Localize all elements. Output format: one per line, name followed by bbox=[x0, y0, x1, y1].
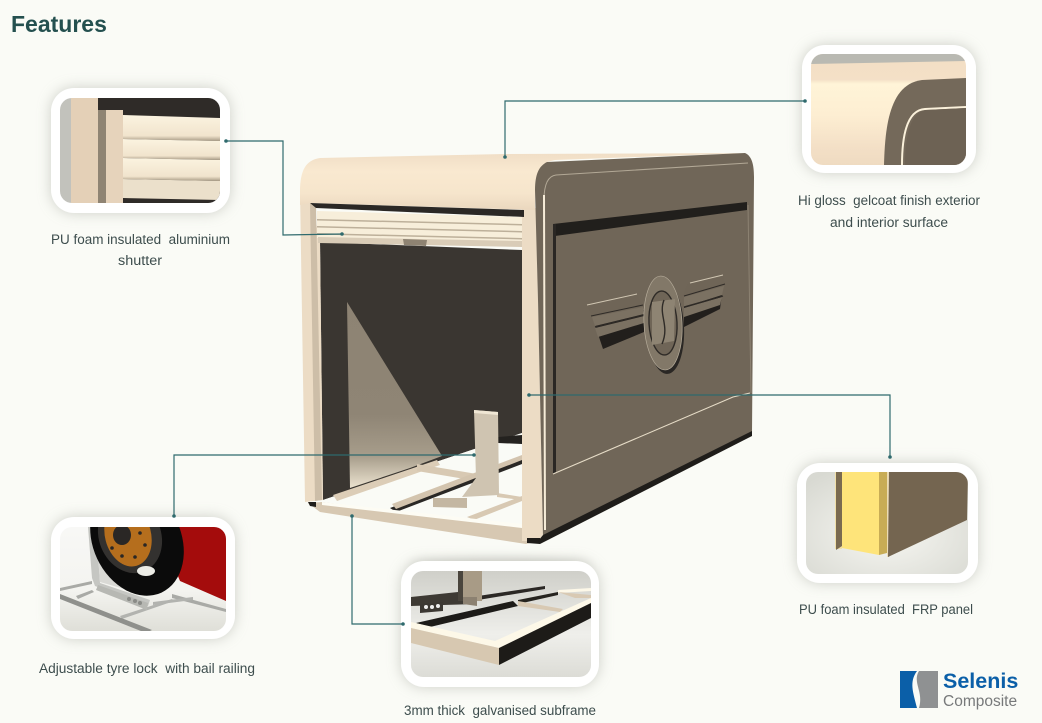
logo mark: blue bbox=[900, 671, 917, 708]
S badge bbox=[652, 299, 675, 345]
caption: shutter line 2: shutter bbox=[118, 253, 163, 268]
logo bbox=[900, 669, 1018, 710]
right wing shadow bbox=[684, 294, 722, 327]
panel: gelcoat finish bbox=[802, 45, 976, 173]
front rail faces bbox=[411, 628, 499, 665]
right wing feathers bbox=[682, 275, 725, 303]
upright plate bbox=[88, 527, 150, 606]
base floor gap bbox=[323, 433, 522, 530]
back rails bbox=[478, 586, 545, 600]
left wing feathers bbox=[587, 294, 643, 316]
subframe bbox=[308, 435, 538, 544]
caption: gelcoat line 2: and interior surface bbox=[830, 215, 948, 230]
interior back wall bbox=[320, 242, 522, 500]
bracket bbox=[411, 592, 466, 606]
ring bbox=[644, 279, 686, 375]
recess shadow bbox=[553, 202, 747, 236]
illustration: bike storage unit bbox=[300, 153, 754, 573]
caption: subframe: 3mm thick galvanised subframe bbox=[404, 703, 596, 718]
interior light triangle bbox=[347, 302, 442, 488]
panel: subframe bbox=[401, 561, 599, 687]
caption: shutter: PU foam insulated aluminium bbox=[51, 232, 230, 247]
panel: tyre lock bbox=[44, 510, 242, 646]
top dark gap bbox=[310, 203, 524, 217]
left pillar bbox=[300, 190, 323, 502]
connector: subframe bbox=[350, 514, 405, 626]
caption: FRP panel: PU foam insulated FRP panel bbox=[799, 602, 973, 617]
left wing shadow bbox=[594, 310, 644, 349]
side panel bbox=[535, 153, 754, 544]
panel: FRP panel bbox=[797, 463, 978, 583]
pillar groove bbox=[310, 204, 322, 501]
connector: FRP panel bbox=[527, 393, 892, 459]
inner rail bbox=[416, 601, 518, 627]
tyre bbox=[90, 527, 184, 596]
red bike body bbox=[178, 527, 226, 601]
lower highlight bbox=[553, 393, 750, 474]
tyre lock upright bbox=[462, 410, 499, 497]
connector: gelcoat bbox=[503, 99, 807, 159]
logo subtitle: Composite bbox=[943, 693, 1017, 710]
caption: tyre lock: Adjustable tyre lock with bail railing bbox=[39, 661, 255, 676]
brake disc bbox=[104, 527, 152, 566]
right pillar bbox=[522, 208, 543, 541]
title: Features bbox=[11, 11, 107, 37]
roof bbox=[300, 153, 746, 210]
main rail bbox=[60, 594, 152, 633]
panel: aluminium shutter bbox=[51, 88, 230, 213]
bottom black band bbox=[538, 431, 752, 544]
emblem bbox=[587, 275, 725, 375]
front rail top bbox=[411, 598, 591, 648]
logo name: Selenis bbox=[943, 669, 1018, 693]
logo mark: grey bbox=[917, 671, 938, 708]
bracket plate bbox=[96, 585, 148, 610]
rear rails bbox=[60, 581, 92, 591]
floor shadow bbox=[410, 559, 590, 573]
connector: tyre lock bbox=[172, 453, 476, 518]
shutter bbox=[317, 211, 522, 247]
top highlight bbox=[544, 163, 748, 200]
caption: gelcoat: Hi gloss gelcoat finish exterior bbox=[798, 193, 981, 208]
pillar feet bbox=[308, 502, 316, 507]
front rail bbox=[308, 502, 538, 544]
connector: shutter bbox=[224, 139, 344, 236]
